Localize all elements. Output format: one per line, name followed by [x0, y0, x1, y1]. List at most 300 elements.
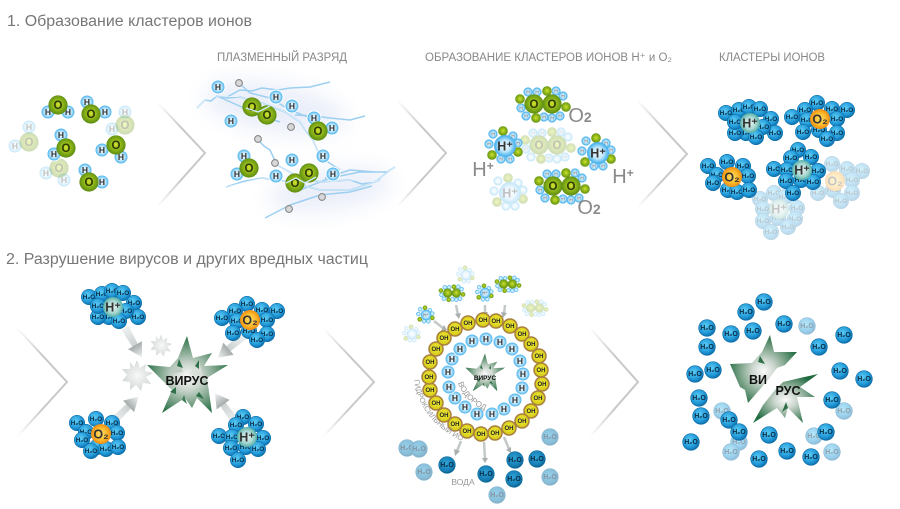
- cluster: H+ lower: H₂O: [780, 178, 792, 185]
- cluster: O2 faded: H₂O: [846, 177, 858, 184]
- panel: water molecules: H: [109, 124, 115, 134]
- cluster: O2 lower: H₂O: [111, 430, 123, 437]
- heading: plasma discharge: ПЛАЗМЕННЫЙ РАЗРЯД: [217, 51, 347, 64]
- cluster: O2: H₂O: [243, 328, 255, 335]
- panel: water molecules: O: [54, 100, 63, 112]
- panel: water molecules: H: [122, 107, 128, 117]
- panel: plasma discharge: O: [248, 102, 257, 114]
- panel: water molecules: H: [99, 145, 105, 155]
- cluster: H+ faded: H₂O: [757, 218, 769, 225]
- cluster: O2 top: H₂O: [801, 117, 813, 124]
- ring: hydrogen: H: [512, 395, 518, 405]
- cluster: H+ right: H: [609, 148, 613, 153]
- water molecules: H₂O: [762, 432, 776, 439]
- cluster: O2 lower: H₂O: [707, 180, 719, 187]
- cluster: H+: H₂O: [128, 300, 140, 307]
- cluster: O2 top: H₂O: [799, 107, 811, 114]
- water molecules: H₂O: [543, 474, 557, 481]
- cluster: H+ left: H: [499, 157, 503, 162]
- cluster: H+ faded: H₂O: [768, 190, 780, 197]
- heading: cluster formation: ОБРАЗОВАНИЕ КЛАСТЕРОВ ИОНОВ Н⁺ и О₂: [425, 52, 672, 64]
- water molecules: H₂O: [819, 429, 833, 436]
- panel: water molecules: O: [85, 177, 94, 189]
- cluster: O2 lower: O₂: [724, 170, 740, 184]
- cluster: O2: H₂O: [231, 318, 243, 325]
- virus: [147, 336, 228, 413]
- panel: plasma discharge: H: [215, 82, 221, 92]
- cluster: H+ right: H: [584, 139, 588, 144]
- tiny clusters: H⁺: [482, 290, 488, 295]
- cluster: H+ lower: H⁺: [239, 430, 255, 444]
- cluster: O2 lower: H₂O: [80, 429, 92, 436]
- cluster: H+ lower: H₂O: [230, 422, 242, 429]
- ring: hydroxyl ions: OH: [432, 347, 440, 353]
- cluster: O2 faded: O: [535, 140, 544, 152]
- cluster: O2 lower: H₂O: [85, 448, 97, 455]
- panel: ion clusters: [700, 95, 870, 240]
- cluster: O2: H₂O: [229, 308, 241, 315]
- label: H+ left: +: [487, 159, 494, 173]
- water molecules: H₂O: [812, 344, 826, 351]
- cluster: H+ lower: H₂O: [226, 434, 238, 441]
- tiny clusters: [402, 265, 548, 342]
- panel: plasma discharge: O: [305, 168, 314, 180]
- ring: hydroxyl ions: OH: [492, 319, 500, 325]
- ring: hydroxyl ions: OH: [534, 354, 544, 360]
- panel: water molecules: H: [99, 177, 105, 187]
- ring: hydrogen: H: [520, 369, 526, 379]
- cluster: H+: H₂O: [113, 318, 125, 325]
- panel: plasma discharge: H: [311, 113, 317, 123]
- panel: plasma discharge: H: [273, 92, 279, 102]
- cluster: O2 faded: H₂O: [846, 190, 858, 197]
- cluster: O2 top: H: [524, 114, 528, 119]
- cluster: H+ faded: [752, 185, 805, 240]
- water molecules: H₂O: [530, 456, 544, 463]
- ring: hydrogen: H: [519, 383, 525, 393]
- water molecules: H₂O: [400, 445, 414, 452]
- cluster: H+: H₂O: [83, 294, 95, 301]
- broken virus: РУС: [776, 384, 800, 398]
- cluster: O2 lower: H₂O: [731, 189, 743, 196]
- cluster: O2 faded: H₂O: [856, 168, 868, 175]
- cluster: O2: H₂O: [241, 301, 253, 308]
- cluster: O2: H₂O: [261, 317, 273, 324]
- cluster: O2 faded: H₂O: [835, 198, 847, 205]
- cluster: O2 lower: H₂O: [112, 444, 124, 451]
- ring: hydroxyl ions: OH: [534, 396, 542, 402]
- cluster: H+ lower: H₂O: [781, 167, 793, 174]
- cluster: O2 lower: H₂O: [711, 172, 723, 179]
- panel: plasma discharge: H: [241, 151, 247, 161]
- panel: plasma discharge: H: [329, 123, 335, 133]
- water molecules: H₂O: [692, 395, 706, 402]
- cluster: O2 lower: H₂O: [91, 444, 103, 451]
- cluster: H+ left: H: [487, 142, 491, 147]
- panel: plasma discharge: H: [320, 151, 326, 161]
- water molecules: H₂O: [857, 376, 871, 383]
- cluster: O2 top: O: [548, 99, 557, 111]
- ring: hydrogen: H: [449, 354, 455, 364]
- cluster: O2 top: O: [530, 99, 539, 111]
- cluster: O2 lower: H₂O: [90, 416, 102, 423]
- cluster: H+: H⁺: [742, 116, 758, 130]
- water molecules: H₂O: [412, 446, 426, 453]
- ring: hydroxyl ions: OH: [424, 375, 434, 381]
- cluster: H+: H₂O: [754, 106, 766, 113]
- cluster: H+: H₂O: [765, 116, 777, 123]
- cluster: O2 faded: H: [559, 130, 563, 135]
- panel: plasma discharge: O: [314, 126, 323, 138]
- cluster: O2 top: H₂O: [841, 107, 853, 114]
- cluster: O2 top: [515, 86, 571, 123]
- cluster: H+ lower: H₂O: [213, 433, 225, 440]
- cluster: H+ faded: H₂O: [765, 229, 777, 236]
- cluster: H+ faded: H⁺: [771, 202, 787, 216]
- cluster: O2 lower: H₂O: [722, 187, 734, 194]
- cluster: O2 top: [784, 95, 855, 147]
- cluster: H+: H₂O: [740, 130, 752, 137]
- ring: hydroxyl ions: OH: [440, 336, 448, 342]
- cluster: O2 faded: [810, 156, 870, 209]
- cluster: O2 top: H: [535, 90, 539, 95]
- ring: hydrogen: H: [457, 344, 463, 354]
- cluster: O2 top: H: [526, 90, 530, 95]
- cluster: H+: H₂O: [106, 288, 118, 295]
- cluster: H+ lower: [211, 409, 271, 468]
- cluster: H+ faded: H₂O: [779, 194, 791, 201]
- panel: plasma discharge: [197, 72, 395, 218]
- panel: water molecules: H: [61, 175, 67, 185]
- panel: plasma discharge: O: [263, 110, 272, 122]
- cluster: O2 top: H₂O: [821, 136, 833, 143]
- cluster: H+ left: H: [516, 141, 520, 146]
- cluster: H+ right: H: [592, 164, 596, 169]
- cluster: H+: H₂O: [103, 314, 115, 321]
- cluster: H+: H₂O: [743, 104, 755, 111]
- cluster: O2 top: H₂O: [831, 130, 843, 137]
- ring: hydrogen: H: [446, 382, 452, 392]
- cluster: O2 lower: H₂O: [100, 446, 112, 453]
- panel: water molecules: O: [55, 163, 64, 175]
- cluster: H+ right: [578, 133, 616, 170]
- cluster: H+ lower: H₂O: [252, 446, 264, 453]
- panel: water molecules: H: [102, 107, 108, 117]
- cluster: O2: H₂O: [216, 315, 228, 322]
- water molecules: H₂O: [507, 476, 521, 483]
- ring: hydroxyl ions: OH: [506, 324, 514, 330]
- water molecules: H₂O: [700, 344, 714, 351]
- cluster: O2 bottom: H: [545, 172, 549, 177]
- ring: hydrogen: H: [452, 393, 458, 403]
- cluster: O2 top: H₂O: [786, 114, 798, 121]
- cluster: H+: H₂O: [729, 130, 741, 137]
- water molecules: H₂O: [706, 367, 720, 374]
- virus: ВИРУС: [166, 374, 208, 388]
- ring: hydroxyl ions: OH: [536, 368, 546, 374]
- water molecules: H₂O: [694, 413, 708, 420]
- cluster: H+ right: H: [580, 149, 584, 154]
- water molecules: H₂O: [780, 448, 794, 455]
- ring: hydroxyl ions: OH: [462, 429, 472, 435]
- cluster: H+ left: H: [511, 134, 515, 139]
- cluster: O2 top: H: [519, 106, 523, 111]
- panel: water molecules: O: [121, 120, 130, 132]
- cluster: O2 bottom: H: [573, 171, 577, 176]
- cluster: O2 lower: [700, 154, 757, 200]
- cluster: H+ faded: H₂O: [757, 206, 769, 213]
- cluster: H+ lower: H₂O: [257, 435, 269, 442]
- panel: water molecules: O: [62, 143, 71, 155]
- cluster: H+ lower: H₂O: [232, 457, 244, 464]
- water molecules: H₂O: [825, 449, 839, 456]
- ring: hydroxyl ions: OH: [440, 413, 448, 419]
- cluster: O2 top: H₂O: [813, 127, 825, 134]
- ring: hydroxyl ions: OH: [432, 401, 440, 407]
- panel: virus attacked by clusters: [69, 283, 285, 468]
- ring: hydrogen: H: [489, 409, 495, 419]
- panel: plasma discharge: H: [289, 155, 295, 165]
- ring: hydroxyl ions: OH: [538, 382, 546, 388]
- water molecules: H₂O: [508, 457, 522, 464]
- panel: water molecules: H: [12, 141, 18, 151]
- cluster: H+: H₂O: [117, 290, 129, 297]
- cluster: O2 bottom: H: [543, 196, 547, 201]
- cluster: O2 bottom: O: [567, 181, 576, 193]
- ring: hydroxyl ions: OH: [464, 321, 472, 327]
- panel: plasma discharge: O: [291, 178, 300, 190]
- cluster: H+ faded: H₂O: [772, 215, 784, 222]
- title: section 1: 1. Образование кластеров ионов: [7, 13, 252, 30]
- water molecules: H₂O: [739, 309, 753, 316]
- water molecules: H₂O: [777, 321, 791, 328]
- cluster: O2 faded: H₂O: [827, 187, 839, 194]
- small virus: ВИРУС: [474, 375, 496, 382]
- cluster: O2 lower: H₂O: [721, 159, 733, 166]
- cluster: O2: O₂: [242, 314, 258, 328]
- water molecules: H₂O: [417, 469, 431, 476]
- ring: hydrogen: [441, 332, 530, 421]
- water molecules: H₂O: [440, 462, 454, 469]
- arrows to virus: [109, 324, 249, 426]
- tiny clusters: H⁺: [423, 312, 429, 317]
- ring: hydroxyl ions: [422, 313, 549, 441]
- water molecules: H₂O: [715, 408, 729, 415]
- cluster: O2 lower: H₂O: [742, 173, 754, 180]
- cluster: O2: [214, 296, 285, 348]
- panel: plasma discharge: H: [234, 169, 240, 179]
- cluster: H+ faded: H₂O: [754, 196, 766, 203]
- panel: water molecules: H: [82, 165, 88, 175]
- ring: hydroxyl ions: OH: [490, 431, 500, 437]
- cluster: H+: H₂O: [733, 107, 745, 114]
- cluster: O2 top: H: [554, 89, 558, 94]
- cluster: O2: H₂O: [271, 308, 283, 315]
- water molecules: H₂O: [479, 471, 493, 478]
- ring: hydrogen: H: [497, 337, 503, 347]
- panel: plasma discharge: H: [273, 171, 279, 181]
- panel: water molecules: O: [25, 137, 34, 149]
- cluster: H+ faded: H₂O: [789, 216, 801, 223]
- ring: hydroxyl ions: OH: [504, 426, 514, 432]
- ring: hydroxyl ions: OH: [450, 327, 460, 333]
- cluster: O2: H₂O: [251, 337, 263, 344]
- cluster: H+: H₂O: [96, 291, 108, 298]
- cluster: O2 faded: H₂O: [841, 166, 853, 173]
- panel: destroyed virus: [683, 294, 872, 467]
- cluster: H+ lower: H₂O: [225, 445, 237, 452]
- ring: hydrogen: H: [474, 409, 480, 419]
- water molecules: H₂O: [752, 456, 766, 463]
- cluster: O2 faded: [520, 127, 576, 164]
- cluster: H+ right: H: [601, 164, 605, 169]
- cluster: O2 lower: H₂O: [106, 420, 118, 427]
- cluster: O2 top: H: [561, 94, 565, 99]
- cluster: H+ left: H⁺: [497, 140, 513, 154]
- cluster: H+ lower: H₂O: [812, 168, 824, 175]
- panel: water molecules: H: [45, 107, 51, 117]
- panel: water molecules: H: [51, 149, 57, 159]
- water molecules: H₂O: [807, 433, 821, 440]
- cluster: H+ lower: H₂O: [787, 190, 799, 197]
- label: O2 bottom: O2: [577, 197, 601, 219]
- panel: water molecules: H: [84, 97, 90, 107]
- cluster: O2 bottom: H: [538, 188, 542, 193]
- cluster: O2 top: H₂O: [831, 116, 843, 123]
- cluster: O2 top: H₂O: [797, 129, 809, 136]
- cluster: H+: H₂O: [720, 110, 732, 117]
- ring: hydroxyl ions: OH: [518, 332, 526, 338]
- ring: hydroxyl ions: OH: [426, 360, 434, 366]
- panel: virus ring reaction: [398, 265, 559, 504]
- label: hydrogen: ВОДОРОД: [458, 382, 486, 412]
- water molecules: H₂O: [543, 434, 557, 441]
- cluster: O2 bottom: H: [569, 198, 573, 203]
- cluster: O2 lower: [69, 411, 126, 459]
- cluster: H+ left: [485, 126, 523, 163]
- cluster: H+ lower: H₂O: [792, 147, 804, 154]
- cluster: H+: H₂O: [769, 130, 781, 137]
- cluster: H+ lower: [766, 142, 826, 201]
- label: H+ right: +: [627, 166, 634, 180]
- cluster: O2 faded: H: [540, 131, 544, 136]
- cluster: H+ lower: H₂O: [237, 414, 249, 421]
- cluster: O2 lower: O₂: [93, 428, 109, 442]
- water molecules: [683, 294, 872, 467]
- cluster: O2 faded: H: [547, 156, 551, 161]
- heading: ion clusters: КЛАСТЕРЫ ИОНОВ: [719, 52, 825, 64]
- water molecules: H₂O: [724, 449, 738, 456]
- fragments: [122, 335, 172, 391]
- ring: hydrogen: H: [509, 344, 515, 354]
- ring: hydroxyl ions: OH: [478, 318, 488, 324]
- cluster: H+ left: H: [508, 157, 512, 162]
- panel: water molecules: H: [65, 107, 71, 117]
- cluster: H+: H₂O: [92, 314, 104, 321]
- cluster: O2 top: H₂O: [826, 106, 838, 113]
- ring: hydroxyl ions: OH: [526, 342, 536, 348]
- cluster: O2 faded: H: [524, 147, 528, 152]
- cluster: O2 lower: H₂O: [702, 163, 714, 170]
- cluster: O2: H₂O: [261, 331, 273, 338]
- panel: plasma discharge: O: [245, 163, 254, 175]
- water molecules: H₂O: [724, 331, 738, 338]
- water molecules: H₂O: [757, 299, 771, 306]
- cluster: O2 top: H: [558, 114, 562, 119]
- broken virus: [730, 335, 818, 423]
- cluster: H+: [81, 283, 146, 329]
- panel: water molecules: O: [112, 140, 121, 152]
- water molecules: [399, 429, 558, 503]
- water molecules: H₂O: [688, 371, 702, 378]
- ring: hydroxyl ions: OH: [518, 419, 526, 425]
- water molecules: H₂O: [837, 408, 851, 415]
- water molecules: H₂O: [746, 328, 760, 335]
- ring: hydrogen: H: [462, 402, 468, 412]
- panel: water molecules: [8, 95, 135, 192]
- cluster: H+ faded: H⁺: [502, 186, 518, 200]
- ring: hydroxyl ions: OH: [450, 422, 460, 428]
- cluster: H+: H₂O: [750, 134, 762, 141]
- cluster: H+ lower: H₂O: [240, 444, 252, 451]
- water molecules: H₂O: [825, 397, 839, 404]
- cluster: H+ left: H: [491, 132, 495, 137]
- cluster: O2 faded: H: [563, 155, 567, 160]
- cluster: H+: H₂O: [757, 124, 769, 131]
- cluster: O2 top: O₂: [812, 112, 828, 126]
- water molecules: H₂O: [684, 439, 698, 446]
- cluster: O2 faded: O: [553, 140, 562, 152]
- water molecules: H₂O: [490, 492, 504, 499]
- cluster: O2 bottom: O: [549, 181, 558, 193]
- cluster: O2 lower: H₂O: [743, 187, 755, 194]
- cluster: H+ right: H: [604, 141, 608, 146]
- cluster: H+ lower: H₂O: [807, 179, 819, 186]
- cluster: H+ lower: H₂O: [795, 177, 807, 184]
- cluster: O2: H₂O: [227, 330, 239, 337]
- cluster: H+ faded: [490, 173, 528, 210]
- water molecules: H₂O: [833, 368, 847, 375]
- title: section 2: 2. Разрушение вирусов и других вредных частиц: [6, 251, 368, 268]
- cluster: O2 bottom: H: [554, 172, 558, 177]
- cluster: H+: H₂O: [120, 308, 132, 315]
- cluster: O2 lower: H₂O: [71, 420, 83, 427]
- cluster: O2 faded: H: [531, 131, 535, 136]
- cluster: O2: H₂O: [256, 307, 268, 314]
- cluster: H+: H₂O: [132, 314, 144, 321]
- cluster: O2 faded: H₂O: [826, 161, 838, 168]
- cluster: O2 faded: H₂O: [812, 190, 824, 197]
- ring: hydrogen: H: [445, 367, 451, 377]
- cluster: O2 top: H₂O: [811, 100, 823, 107]
- ring: hydroxyl ions: OH: [526, 409, 536, 415]
- cluster: O2 bottom: [534, 168, 590, 205]
- panel: water molecules: H: [118, 152, 124, 162]
- cluster: O2 faded: O₂: [827, 174, 843, 188]
- panel: plasma discharge: H: [330, 169, 336, 179]
- cluster: H+ faded: H₂O: [782, 224, 794, 231]
- label: H+ left: H: [472, 159, 487, 181]
- label: H+ right: H: [612, 166, 627, 188]
- cluster: H+ faded: H₂O: [791, 205, 803, 212]
- water molecules: H₂O: [732, 429, 746, 436]
- arrows: chevrons between stages: [17, 100, 687, 437]
- label: water: ВОДА: [451, 477, 475, 487]
- cluster: O2 lower: H₂O: [737, 163, 749, 170]
- cluster: O2 bottom: H: [577, 196, 581, 201]
- ring: hydrogen: H: [483, 334, 489, 344]
- ring: hydrogen: H: [469, 336, 475, 346]
